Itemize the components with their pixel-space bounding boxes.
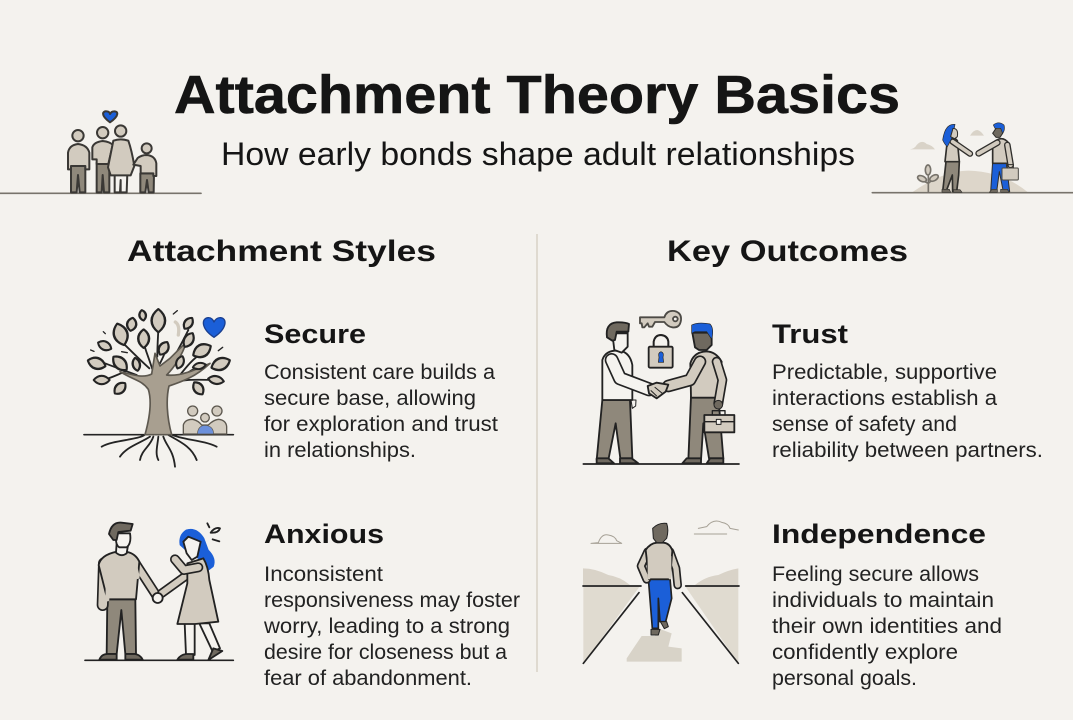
icon: two people shaking hands: [872, 123, 1073, 193]
icon: handshake with key and lock: [583, 311, 739, 464]
text: anxious description: desire for closeness but a: [264, 641, 507, 664]
subtitle: How early bonds shape adult relationships: [221, 136, 855, 172]
icon: tree with roots, heart and family: [84, 309, 233, 467]
card: independence: [772, 519, 1002, 690]
text: trust description: [772, 361, 1043, 462]
text: anxious description: fear of abandonment.: [264, 667, 472, 690]
text: secure description: in relationships.: [264, 439, 416, 462]
text: independence description: confidently explore: [772, 641, 958, 664]
text: anxious description: Inconsistent: [264, 563, 383, 586]
text: independence description: Feeling secure allows: [772, 563, 979, 586]
text: secure description: for exploration and trust: [264, 413, 498, 436]
text: independence description: personal goals.: [772, 667, 917, 690]
heading: key outcomes: Key Outcomes: [667, 235, 908, 268]
card: anxious: [263, 519, 520, 690]
heading: secure: Secure: [264, 319, 366, 349]
text: secure description: [264, 361, 498, 462]
icon: family with heart: [0, 111, 201, 193]
text: secure description: secure base, allowing: [264, 387, 476, 410]
divider: [536, 234, 538, 672]
text: independence description: [772, 563, 1002, 690]
icon: anxious couple holding hands: [85, 523, 233, 660]
text: anxious description: worry, leading to a strong: [263, 615, 510, 638]
text: trust description: interactions establish a: [772, 387, 997, 410]
heading: trust: Trust: [772, 319, 848, 349]
text: trust description: sense of safety and: [772, 413, 957, 436]
text: anxious description: [263, 563, 520, 690]
heading: independence: Independence: [772, 519, 986, 549]
icon: person walking a path: [583, 521, 739, 663]
text: secure description: Consistent care builds a: [264, 361, 495, 384]
text: independence description: individuals to maintain: [772, 589, 994, 612]
text: independence description: their own identities and: [772, 615, 1002, 638]
heading: attachment styles: Attachment Styles: [127, 235, 436, 268]
heading: anxious: Anxious: [264, 519, 384, 549]
title: Attachment Theory Basics: [174, 65, 900, 125]
text: trust description: reliability between partners.: [772, 439, 1043, 462]
text: anxious description: responsiveness may foster: [264, 589, 520, 612]
card: secure: [264, 319, 498, 462]
text: trust description: Predictable, supportive: [772, 361, 997, 384]
card: trust: [772, 319, 1043, 462]
